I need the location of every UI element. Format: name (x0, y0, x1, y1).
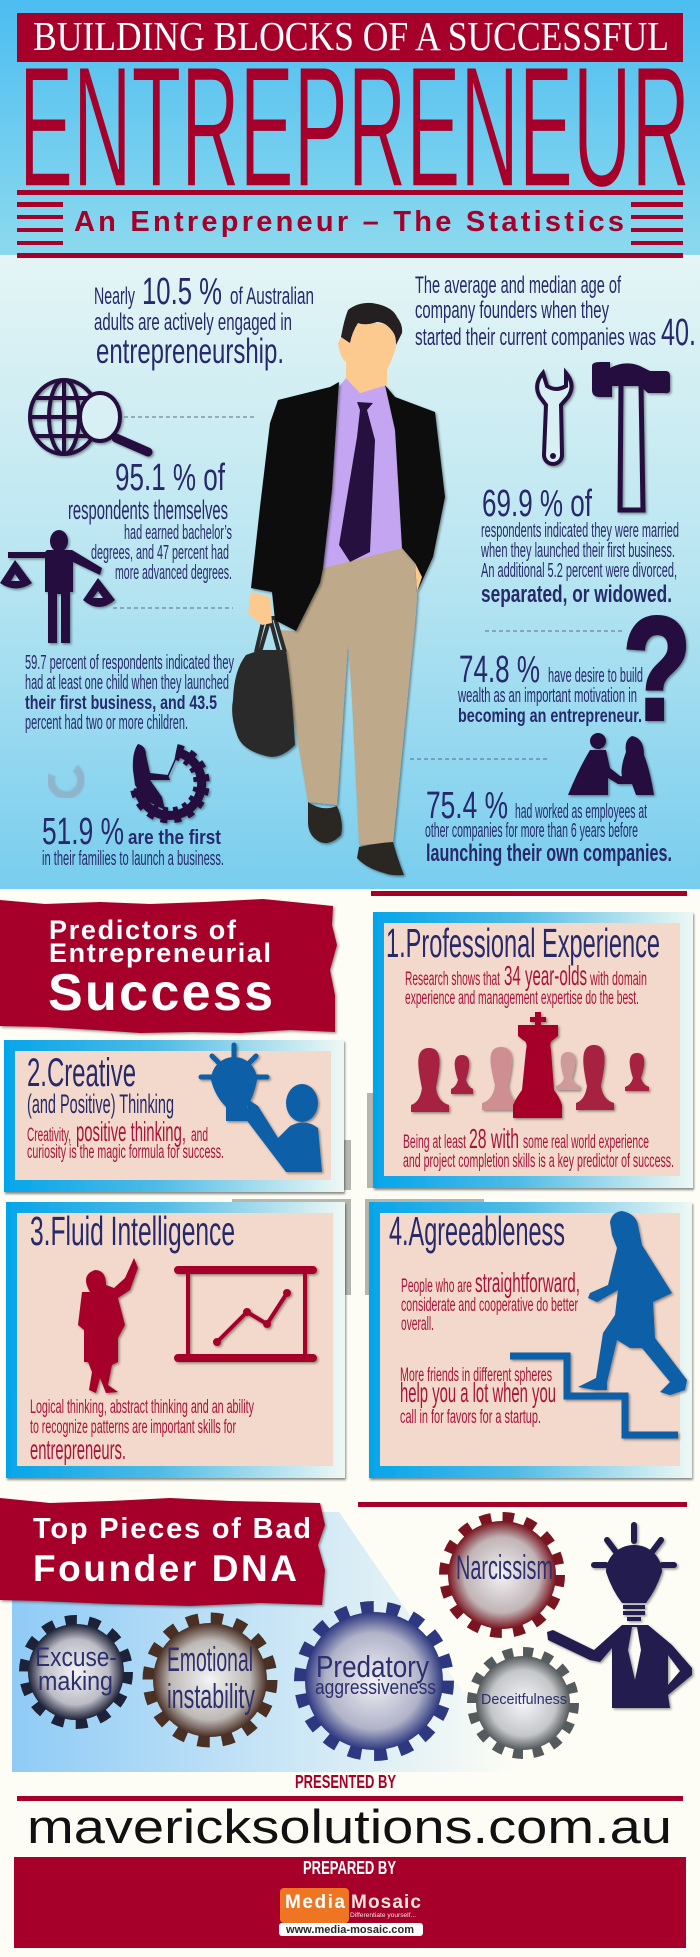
card 2: creative thinking: Creativity, (27, 1125, 71, 1146)
shirt (323, 378, 402, 568)
chess pieces (411, 1012, 649, 1118)
logo: media mosaic (279, 1888, 423, 1936)
gear: emotional instability: Emotional (167, 1641, 253, 1679)
card 3: fluid intelligence: 3.Fluid Intelligence (30, 1208, 235, 1254)
header background (0, 0, 700, 255)
stat: 69.9 percent: 69.9 % of (482, 483, 592, 525)
stat: 95.1 percent (68, 457, 232, 584)
footer band: PREPARED BY (303, 1858, 396, 1878)
card 4: agreeableness: overall. (401, 1314, 434, 1335)
icon: gear with seated figure (133, 744, 202, 815)
stat: 75.4 percent: 75.4 % (426, 785, 508, 827)
card 2: creative thinking: and (191, 1125, 208, 1146)
stat: children (25, 652, 234, 734)
logo: media mosaic: Media (285, 1892, 345, 1913)
gear: excuse-making: Excuse- (35, 1642, 117, 1672)
divider (124, 416, 256, 418)
card 4: agreeableness: call in for favors for a startup. (400, 1407, 541, 1428)
stat: 51.9 percent: in their families to launch a business. (42, 848, 224, 870)
stat: 10.5 percent: adults are actively engaged in (94, 309, 292, 336)
banner: bad founder DNA: Top Pieces of Bad (33, 1513, 311, 1545)
hands (248, 563, 422, 625)
icon: faded gear (51, 768, 81, 795)
pants (279, 548, 417, 845)
gear: predatory aggressiveness: aggressiveness (315, 1677, 436, 1699)
stat: 75.4 percent (425, 785, 672, 867)
background wedge (12, 1512, 518, 1772)
stat: 74.8 percent (457, 649, 643, 727)
card 4: agreeableness: straightforward, (475, 1267, 580, 1298)
stat: 74.8 percent: becoming an entrepreneur. (458, 706, 642, 727)
card 1: professional experience: 28 with (469, 1123, 519, 1154)
text: presented by: PRESENTED BY (295, 1772, 396, 1792)
bag (232, 618, 295, 757)
stat: 95.1 percent: degrees, and 47 percent had (91, 542, 229, 564)
rule (17, 1796, 683, 1801)
card 3: fluid intelligence (6, 1199, 351, 1478)
shoes (308, 802, 404, 875)
stat: 10.5 percent: entrepreneurship. (96, 332, 284, 371)
head (338, 303, 402, 393)
card 1: professional experience: Being at least (403, 1132, 466, 1153)
stat: 51.9 percent (42, 811, 224, 870)
card 1: professional experience: 34 year-olds (504, 960, 587, 991)
figure: businessman (232, 303, 445, 875)
card 4: agreeableness: More friends in different spheres (400, 1365, 552, 1386)
card 3: fluid intelligence: to recognize patterns are important skills for (30, 1417, 236, 1438)
stat: 95.1 percent: respondents themselves (68, 495, 228, 525)
card 2: creative thinking (4, 1040, 351, 1192)
statistics background (0, 255, 700, 889)
stat: children: had at least one child when they launched (25, 672, 229, 694)
card 4: agreeableness: help you a lot when you (400, 1377, 556, 1408)
banner: bad founder DNA (0, 1498, 325, 1606)
website: mavericksolutions.com.au (27, 1800, 672, 1853)
icon: globe and magnifier (30, 380, 148, 454)
icon: figure with scales (0, 530, 115, 643)
icon: handshake (568, 733, 654, 795)
icon: wrench and hammer (537, 362, 670, 510)
stat: 10.5 percent: 10.5 % (142, 271, 222, 313)
stat: 95.1 percent: had earned bachelor’s (124, 522, 232, 544)
stat: 10.5 percent: of Australian (230, 283, 314, 310)
stat: 51.9 percent: 51.9 % (42, 811, 124, 853)
rule (358, 1502, 687, 1507)
stat: children: their first business, and 43.5 (25, 693, 217, 714)
gear: narcissism: Narcissism (456, 1549, 553, 1587)
gear: emotional instability: instability (167, 1678, 255, 1716)
logo: media mosaic: www.media-mosaic.com (285, 1924, 414, 1936)
stat: 51.9 percent: are the first (128, 827, 221, 849)
gear: predatory aggressiveness: Predatory (316, 1649, 429, 1684)
card 4: agreeableness (365, 1199, 692, 1478)
gear: emotional instability (148, 1618, 272, 1742)
card 2: creative thinking: positive thinking, (76, 1116, 186, 1147)
icon: presenter (78, 1258, 138, 1393)
gear: narcissism (444, 1517, 560, 1633)
stat: 74.8 percent: 74.8 % (459, 649, 540, 691)
banner: bad founder DNA: Founder DNA (33, 1548, 297, 1589)
card 3: fluid intelligence: entrepreneurs. (30, 1434, 126, 1465)
gear: excuse-making (24, 1620, 128, 1724)
icon: bulb-headed man (547, 1525, 692, 1708)
stat: 69.9 percent (480, 483, 679, 608)
rule (371, 891, 687, 896)
icon: light bulb and person (201, 1045, 322, 1172)
stat: children: percent had two or more children. (25, 712, 188, 734)
banner: predictors of success: Success (48, 964, 273, 1022)
banner: predictors of success: Predictors of (49, 915, 237, 945)
gear: deceitfulness: Deceitfulness (481, 1691, 567, 1708)
header (17, 13, 690, 258)
divider (410, 758, 550, 760)
stat: 95.1 percent: 95.1 % of (115, 457, 225, 499)
banner: predictors of success: Entrepreneurial (49, 938, 271, 968)
gear: predatory aggressiveness (300, 1607, 448, 1755)
gear: excuse-making: making (38, 1666, 113, 1696)
card 1: professional experience: with domain (589, 969, 647, 990)
card 4: agreeableness: People who are (401, 1276, 472, 1297)
subtitle band (17, 190, 683, 258)
divider (113, 607, 233, 609)
icon: stairs (510, 1356, 678, 1435)
subtitle band: An Entrepreneur – The Statistics (74, 206, 624, 238)
icon: chart board (178, 1270, 313, 1358)
jacket (251, 382, 445, 631)
card 4: agreeableness: 4.Agreeableness (389, 1208, 565, 1254)
stat: 10.5 percent: Nearly (94, 283, 135, 310)
divider (485, 630, 625, 632)
tie (339, 402, 375, 562)
card 2: creative thinking: (and Positive) Thinking (27, 1089, 174, 1119)
stat: founder age (415, 272, 696, 354)
gear: deceitfulness (472, 1652, 574, 1754)
stat: 10.5 percent (94, 271, 314, 371)
stat: children: 59.7 percent of respondents indicated they (25, 652, 234, 674)
logo: media mosaic: Differentiate yourself... (350, 1913, 416, 1919)
card 1: professional experience (367, 912, 693, 1188)
footer band (14, 1857, 686, 1948)
banner: predictors of success (0, 899, 337, 1033)
stat: 95.1 percent: more advanced degrees. (115, 562, 232, 584)
card 1: professional experience: Research shows that (405, 969, 500, 990)
icon: woman climbing (578, 1211, 687, 1395)
logo: media mosaic: Mosaic (351, 1892, 421, 1913)
card 2: creative thinking: curiosity is the magic formula for success. (27, 1142, 224, 1163)
card 3: fluid intelligence: Logical thinking, abstract thinking and an ability (30, 1397, 254, 1418)
card 2: creative thinking: 2.Creative (27, 1051, 136, 1095)
